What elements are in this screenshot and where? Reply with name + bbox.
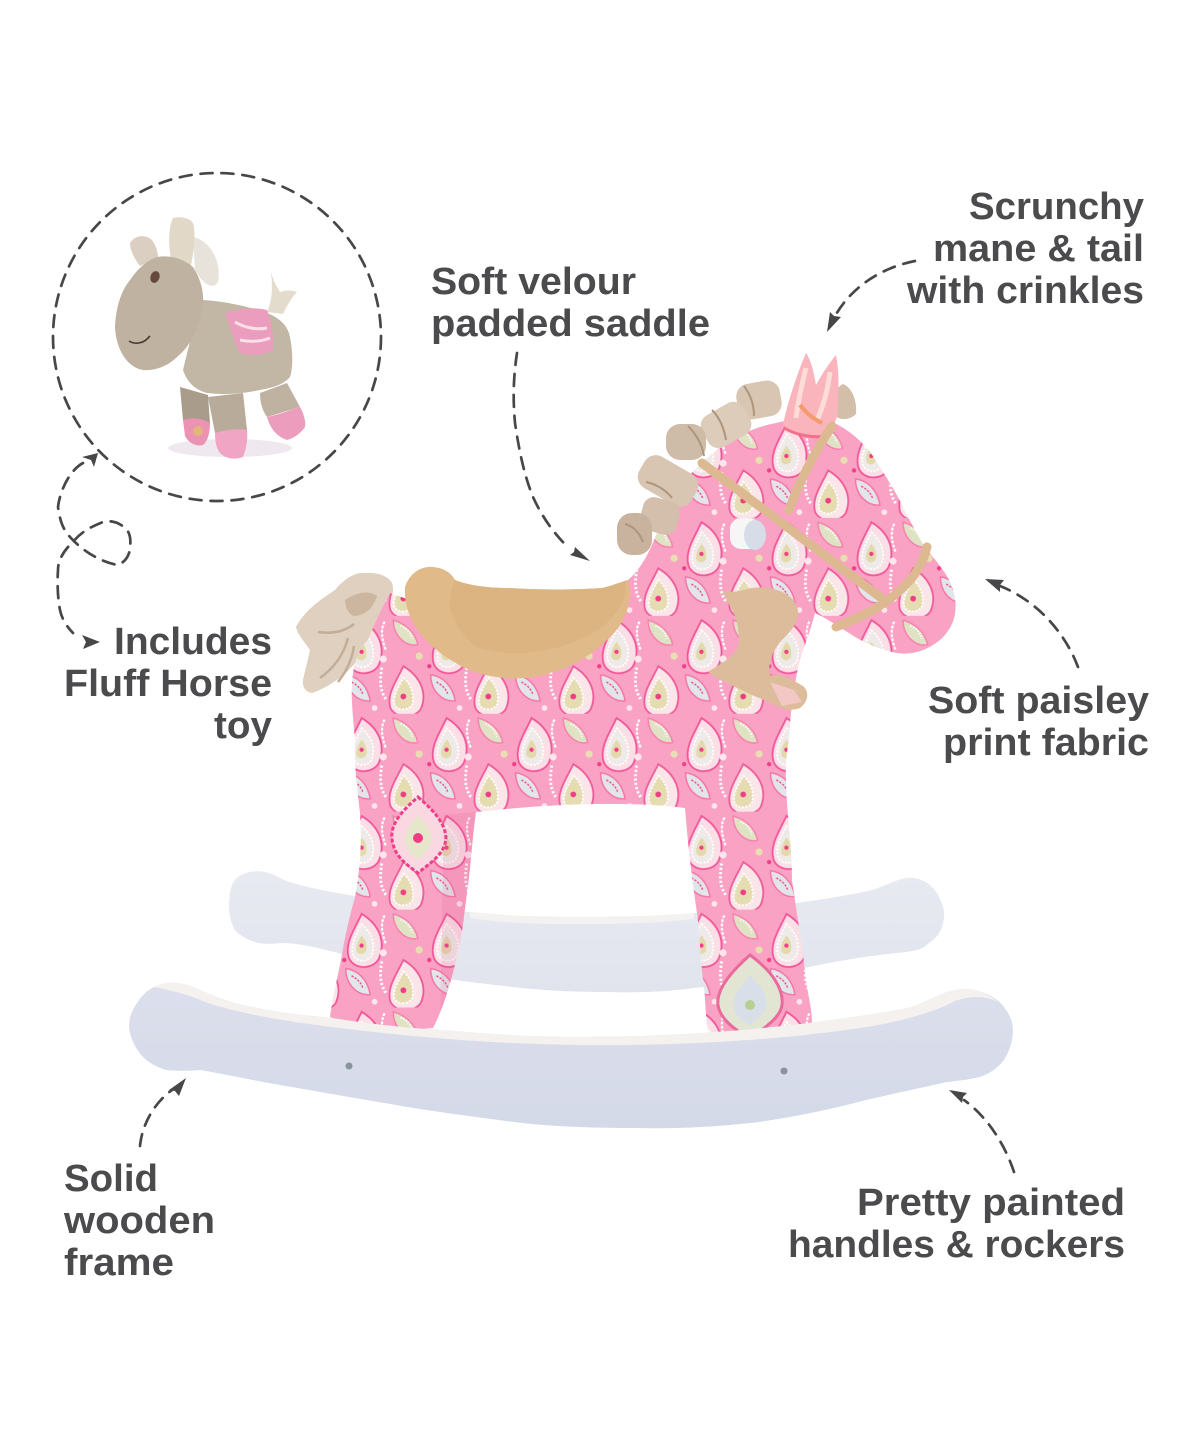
arrow: frame bbox=[140, 1078, 186, 1146]
ears and topknot bbox=[783, 353, 856, 438]
label: mane: Scrunchy bbox=[969, 186, 1144, 228]
back rocker bbox=[229, 871, 944, 992]
arrow: saddle bbox=[514, 353, 590, 561]
label: frame bbox=[63, 1158, 215, 1284]
label: rockers: Pretty painted bbox=[857, 1182, 1125, 1224]
label: toy: Fluff Horse bbox=[64, 663, 272, 705]
tail bbox=[296, 573, 393, 693]
label: fabric bbox=[928, 680, 1149, 764]
label: fabric: print fabric bbox=[943, 722, 1149, 764]
label: saddle bbox=[431, 261, 710, 345]
arrow: fabric bbox=[985, 579, 1078, 667]
saddle bbox=[405, 567, 630, 678]
label: toy: Includes bbox=[114, 621, 272, 663]
mane bbox=[617, 378, 784, 555]
small toy in pocket bbox=[707, 587, 807, 710]
arrow: mane bbox=[827, 261, 915, 332]
label: frame: frame bbox=[64, 1242, 174, 1284]
label: mane: with crinkles bbox=[906, 270, 1144, 312]
rocking horse bbox=[129, 353, 1013, 1128]
label: frame: Solid bbox=[64, 1158, 158, 1200]
label: saddle: padded saddle bbox=[431, 303, 710, 345]
screw right bbox=[780, 1068, 788, 1074]
arrow: toy callout bbox=[58, 453, 130, 649]
fold shading bbox=[440, 812, 476, 1030]
leg medallion rear bbox=[392, 797, 446, 873]
arrow: rockers bbox=[949, 1090, 1014, 1172]
label: rockers bbox=[788, 1182, 1125, 1266]
label: saddle: Soft velour bbox=[431, 261, 636, 303]
label: mane: mane & tail bbox=[933, 228, 1144, 270]
handle bbox=[730, 518, 766, 550]
screw left bbox=[346, 1062, 352, 1070]
dashed circle with toy bbox=[53, 173, 381, 501]
leg medallion front bbox=[718, 955, 782, 1039]
label: toy bbox=[64, 621, 272, 747]
label: fabric: Soft paisley bbox=[928, 680, 1149, 722]
body bbox=[330, 421, 956, 1032]
label: frame: wooden bbox=[63, 1200, 215, 1242]
label: mane bbox=[906, 186, 1144, 312]
label: rockers: handles & rockers bbox=[788, 1224, 1125, 1266]
label: toy: toy bbox=[214, 705, 272, 747]
front rocker bbox=[129, 983, 1013, 1128]
icon: Fluff Horse toy bbox=[115, 217, 305, 459]
bridle bbox=[702, 426, 927, 627]
